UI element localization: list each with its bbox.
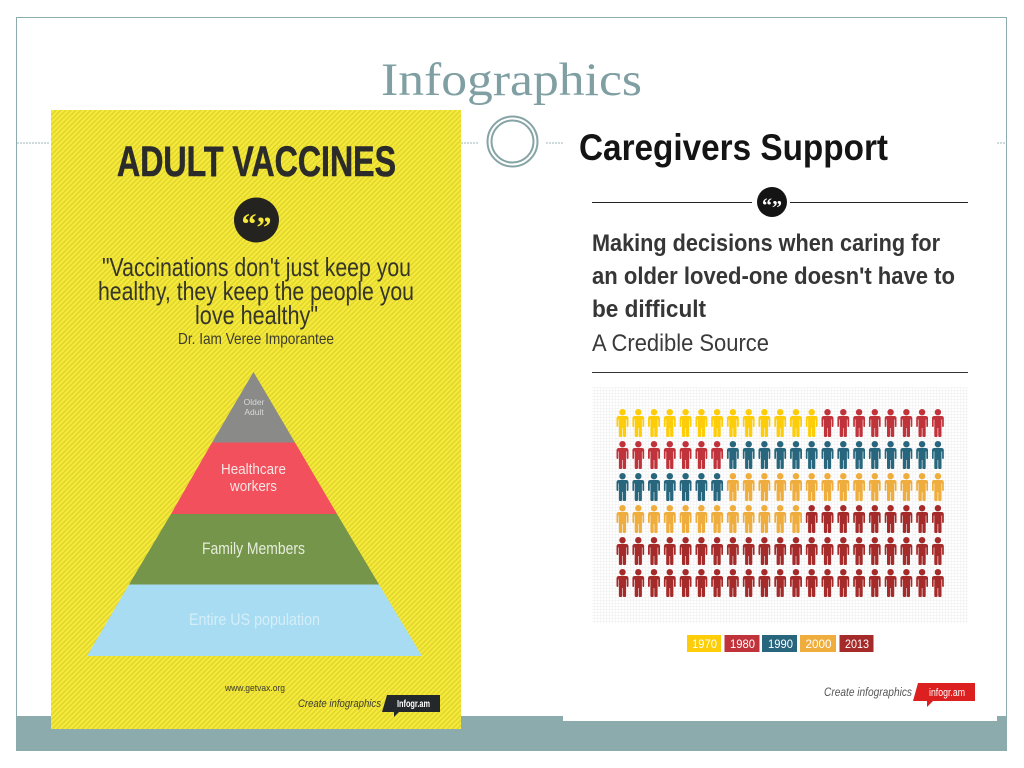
legend item: 1970: 1970 <box>692 637 717 651</box>
quote text: love healthy" <box>195 300 318 330</box>
pyramid chart <box>87 372 422 656</box>
legend item: 1970 <box>687 635 721 652</box>
bold statement: Making decisions when caring for <box>592 230 940 257</box>
bold statement: be difficult <box>592 296 706 323</box>
row 5 <box>616 537 944 565</box>
panel: caregivers support <box>563 110 997 721</box>
icon: quote badge: “ <box>242 208 256 241</box>
divider with quote badge: ” <box>772 197 782 219</box>
legend item: 1980: 1980 <box>730 637 755 651</box>
pyramid tier: entire US population: Entire US population <box>189 610 320 629</box>
legend item: 1990 <box>762 635 797 652</box>
quote text: healthy, they keep the people you <box>98 276 414 306</box>
row 4 <box>616 505 944 533</box>
legend <box>687 635 874 652</box>
infogram credit: Create infographics <box>824 685 912 699</box>
pyramid tier: healthcare workers: Healthcare <box>221 461 286 478</box>
infogram credit <box>298 695 440 717</box>
pyramid tier: family members: Family Members <box>202 539 305 558</box>
panel: adult vaccines poster <box>51 110 461 729</box>
poster heading: ADULT VACCINES <box>117 138 396 186</box>
quote attribution: Dr. Iam Veree Imporantee <box>178 331 334 348</box>
infogram credit: infogr.am <box>929 687 965 699</box>
infogram credit <box>824 683 975 707</box>
source url: www.getvax.org <box>224 683 285 694</box>
row 6 <box>616 569 944 597</box>
panel heading: Caregivers Support <box>579 127 888 168</box>
pyramid tier: healthcare workers <box>171 442 337 514</box>
icon: quote badge: ” <box>256 211 272 244</box>
icon: quote badge <box>234 198 279 244</box>
quote text <box>98 252 414 330</box>
pyramid tier: entire US population <box>87 584 422 656</box>
legend item: 2013 <box>840 635 874 652</box>
pyramid tier: family members <box>129 514 379 584</box>
row 1 <box>616 409 944 437</box>
legend item: 2013: 2013 <box>845 637 869 651</box>
icon: double ring <box>488 116 538 166</box>
source line: A Credible Source <box>592 330 769 357</box>
pyramid tier: older adult: Older <box>244 397 265 407</box>
legend item: 2000 <box>800 635 836 652</box>
bold statement <box>592 230 955 323</box>
quote text: "Vaccinations don't just keep you <box>102 252 411 282</box>
bold statement: an older loved-one doesn't have to <box>592 263 955 290</box>
title: Infographics <box>381 54 642 106</box>
row 2 <box>616 441 944 469</box>
pyramid tier: healthcare workers: workers <box>229 478 277 495</box>
legend item: 1990: 1990 <box>768 637 793 651</box>
pyramid tier: older adult: Adult <box>244 407 264 417</box>
pyramid tier: older adult <box>212 372 295 442</box>
divider with quote badge <box>592 187 968 219</box>
row 3 <box>616 473 944 501</box>
infogram credit: Infogr.am <box>397 699 430 710</box>
infogram credit: Create infographics <box>298 698 381 710</box>
divider with quote badge: “ <box>762 195 772 217</box>
pictogram chart <box>592 387 968 623</box>
legend item: 1980 <box>724 635 760 652</box>
legend item: 2000: 2000 <box>806 637 832 651</box>
